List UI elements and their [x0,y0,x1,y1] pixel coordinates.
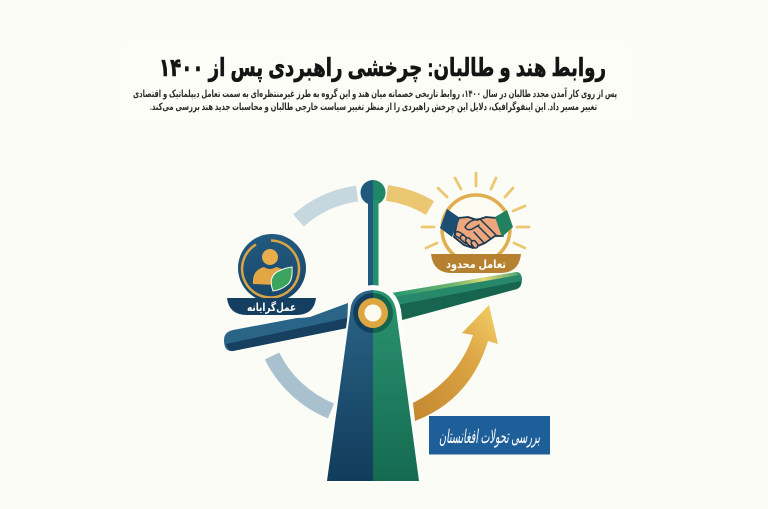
arrow: rising gold curve [413,305,498,421]
source logo box: بررسی تحولات افغانستان [439,427,540,448]
badge: limited engagement [422,173,529,273]
person icon [253,249,285,285]
header panel [122,42,630,124]
arc: upper left pale blue [298,194,357,220]
arc: upper right gold [387,193,430,208]
gold ring [442,195,510,263]
leaf icon [271,267,292,291]
medal circle [238,234,306,302]
source logo box [429,416,550,454]
intro line 1: پس از روی کار آمدن مجدد طالبان در سال ۱۴۰۰، روابط تاریخی خصمانه میان هند و این گروه به طرز غیرمنتظره‌ای به سمت تعامل دیپلماتیک و اقتصادی [133,87,617,100]
beam: left arm [224,303,348,351]
hub [353,293,393,333]
arc: lower left grey blue [272,356,331,411]
scale pointer: knob and stem [360,180,386,286]
sun rays [422,173,529,248]
scale base [324,285,422,483]
beam: right arm [392,272,522,320]
gold ring [242,240,299,297]
label banner: تعامل محدود [446,259,506,272]
label banner: عمل‌گرایانه [247,301,296,314]
title: روابط هند و طالبان: چرخشی راهبردی پس از ۱۴۰۰ [159,54,606,83]
handshake icon [440,209,513,249]
badge: pragmatism [227,234,316,315]
